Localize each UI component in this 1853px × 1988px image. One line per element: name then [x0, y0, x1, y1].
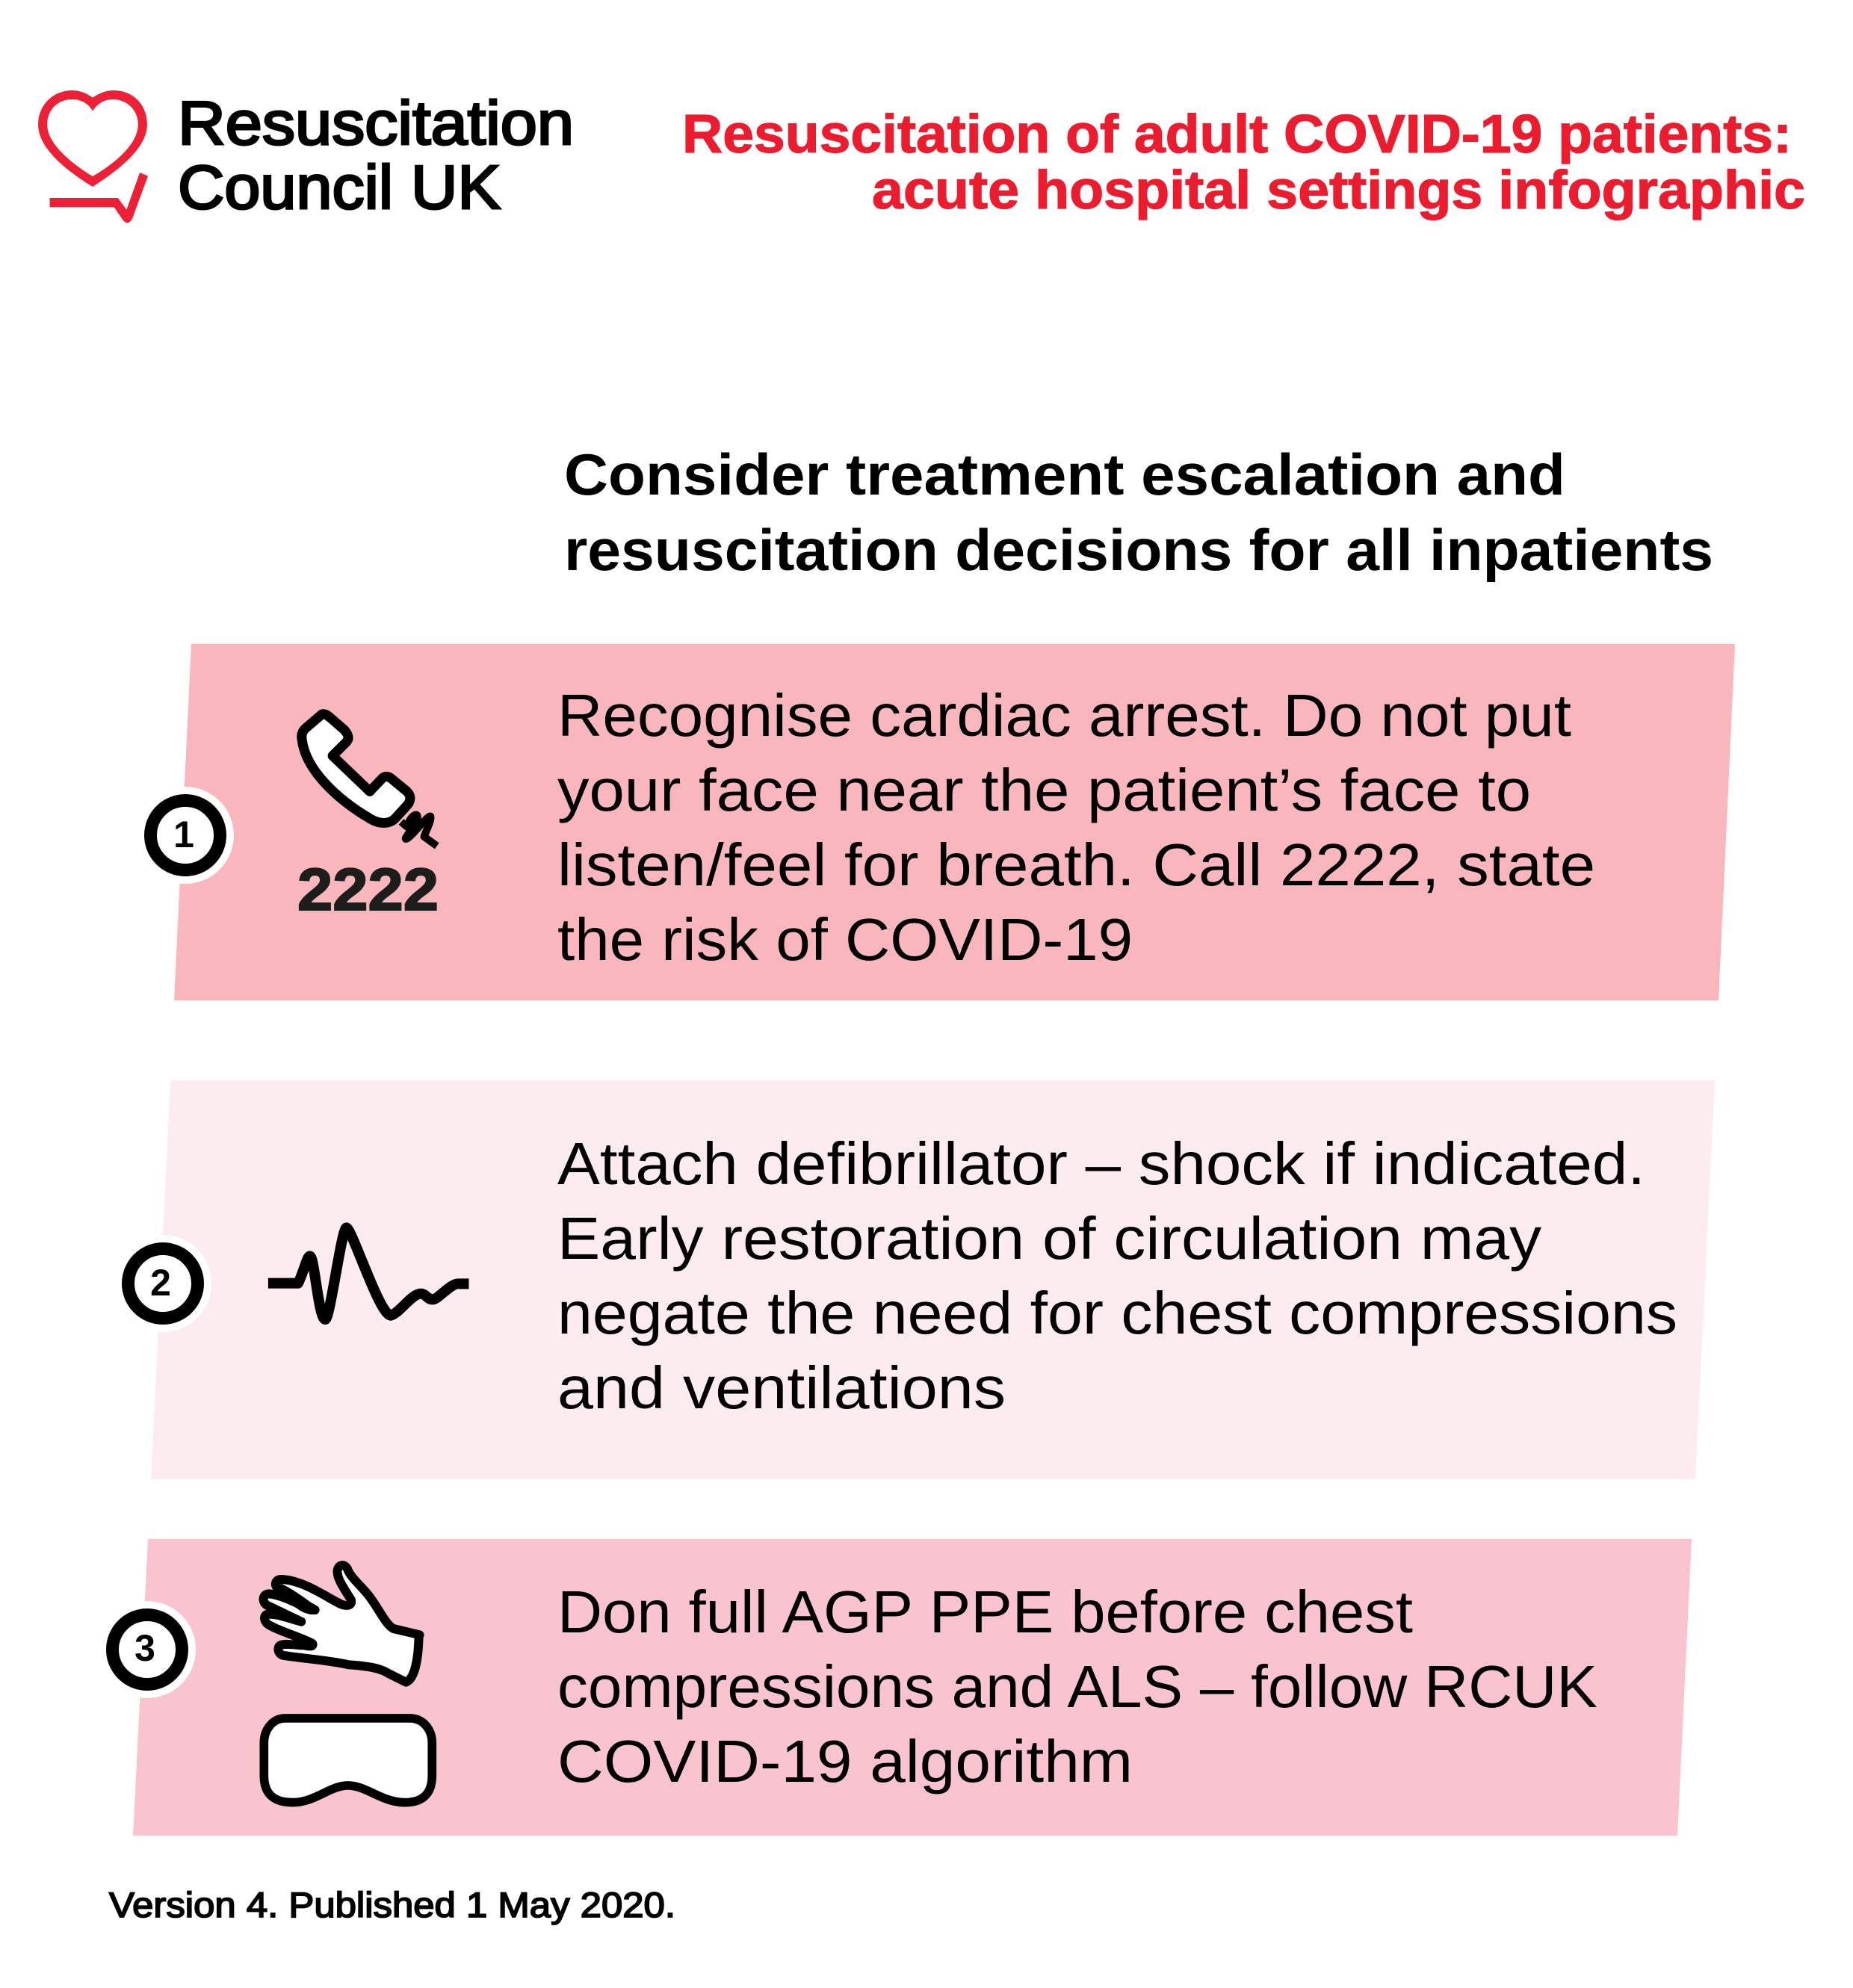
text: step 2 instructions: and ventilations [557, 1354, 1006, 1421]
text: step 1 instructions: Recognise cardiac arrest. Do not put [557, 682, 1571, 749]
panel: step 1 recognise cardiac arrest [137, 644, 1735, 1000]
text: step 1 instructions [557, 682, 1595, 973]
logo wordmark: Resuscitation [178, 88, 574, 158]
heading: resuscitation decisions for all inpatients [564, 517, 1713, 583]
panel background [174, 644, 1735, 1000]
panel background [133, 1539, 1692, 1836]
text: step 3 instructions: compressions and ALS – follow RCUK [557, 1653, 1597, 1720]
icon label 2222: 2222 [297, 856, 439, 923]
title: acute hospital settings infographic [872, 161, 1805, 220]
panel: step 2 attach defibrillator [114, 1080, 1715, 1479]
icon: telephone [302, 714, 437, 846]
panel: step 3 don PPE [99, 1539, 1692, 1836]
logo wordmark [178, 88, 574, 222]
title [682, 105, 1805, 220]
icon: heart rhythm trace [268, 1227, 469, 1319]
icon: glove [264, 1565, 420, 1682]
step number 2 [114, 1235, 211, 1332]
footer: version note: Version 4. Published 1 May 2020. [109, 1885, 675, 1924]
panel background [151, 1080, 1715, 1479]
text: step 3 instructions: COVID-19 algorithm [557, 1728, 1133, 1795]
text: step 3 instructions [557, 1579, 1597, 1795]
step number 1 [137, 787, 234, 884]
text: step 1 instructions: your face near the patient’s face to [557, 757, 1531, 823]
step number 1: 1 [173, 814, 194, 855]
text: step 3 instructions: Don full AGP PPE before chest [557, 1579, 1413, 1645]
icon: goggles [264, 1718, 432, 1803]
step number 3: 3 [134, 1627, 155, 1669]
logo: Resuscitation Council UK [38, 88, 574, 223]
text: step 2 instructions: negate the need for chest compressions [557, 1280, 1677, 1346]
text: step 1 instructions: listen/feel for breath. Call 2222, state [557, 832, 1595, 898]
text: step 2 instructions: Early restoration of circulation may [557, 1205, 1541, 1272]
icon: heart and pulse tick [38, 90, 148, 223]
heading: Consider treatment escalation and [564, 442, 1565, 507]
title: Resuscitation of adult COVID-19 patients: [682, 105, 1792, 164]
text: step 2 instructions [557, 1130, 1677, 1421]
text: step 2 instructions: Attach defibrillator – shock if indicated. [557, 1130, 1645, 1197]
heading [564, 442, 1713, 583]
text: step 1 instructions: the risk of COVID-19 [557, 906, 1133, 973]
step number 2: 2 [150, 1262, 171, 1304]
logo wordmark: Council UK [178, 152, 501, 222]
step number 3 [99, 1601, 196, 1698]
